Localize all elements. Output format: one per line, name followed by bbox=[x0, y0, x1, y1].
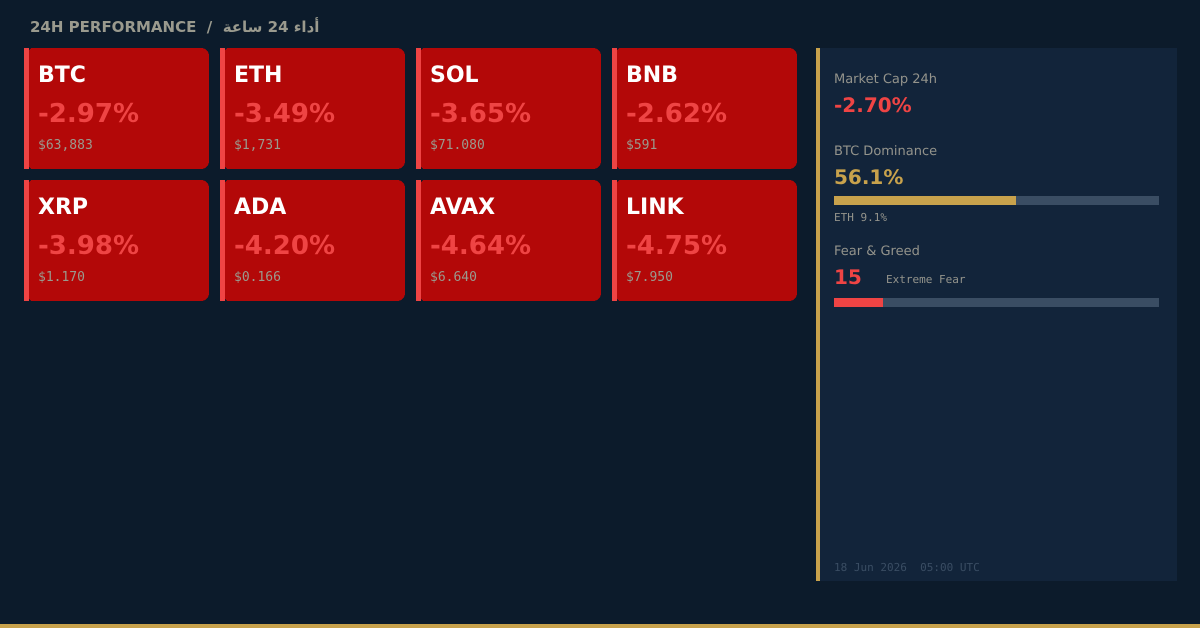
card: ETH: $1,731 bbox=[234, 138, 281, 153]
market cap label: Market Cap 24h bbox=[834, 72, 937, 87]
BTC dominance value: 56.1% bbox=[834, 165, 903, 189]
card: ADA: -4.20% bbox=[234, 231, 335, 261]
card: LINK: -4.75% bbox=[626, 231, 727, 261]
fear and greed progress bar bbox=[834, 298, 1159, 307]
panel: market stats bbox=[816, 48, 1177, 581]
card: ADA: $0.166 bbox=[234, 270, 281, 285]
market cap value: -2.70% bbox=[834, 93, 912, 117]
card: XRP: -3.98% bbox=[38, 231, 139, 261]
ETH dominance: ETH 9.1% bbox=[834, 211, 887, 224]
card: LINK: LINK bbox=[626, 195, 685, 220]
dominance progress bar bbox=[834, 196, 1159, 205]
card: XRP: $1.170 bbox=[38, 270, 85, 285]
title: 24H PERFORMANCE / أداء 24 ساعة bbox=[30, 18, 319, 36]
card: SOL: $71.080 bbox=[430, 138, 485, 153]
fear and greed value: 15 bbox=[834, 265, 862, 289]
card: ADA bbox=[220, 180, 405, 301]
card: SOL: -3.65% bbox=[430, 99, 531, 129]
card: LINK: $7.950 bbox=[626, 270, 673, 285]
card: BNB: $591 bbox=[626, 138, 657, 153]
card: SOL: SOL bbox=[430, 63, 479, 88]
card: BTC: $63,883 bbox=[38, 138, 93, 153]
card: BTC: BTC bbox=[38, 63, 86, 88]
card: AVAX: $6.640 bbox=[430, 270, 477, 285]
card: AVAX: -4.64% bbox=[430, 231, 531, 261]
bottom accent bar bbox=[0, 624, 1200, 628]
BTC dominance label: BTC Dominance bbox=[834, 144, 937, 159]
card: ETH bbox=[220, 48, 405, 169]
card: AVAX: AVAX bbox=[430, 195, 495, 220]
card: XRP: XRP bbox=[38, 195, 88, 220]
card: BTC: -2.97% bbox=[38, 99, 139, 129]
card: ETH: -3.49% bbox=[234, 99, 335, 129]
card: XRP bbox=[24, 180, 209, 301]
card: AVAX bbox=[416, 180, 601, 301]
card: SOL bbox=[416, 48, 601, 169]
card: BTC bbox=[24, 48, 209, 169]
card: ETH: ETH bbox=[234, 63, 282, 88]
card: BNB: -2.62% bbox=[626, 99, 727, 129]
card: BNB bbox=[612, 48, 797, 169]
timestamp: 18 Jun 2026 05:00 UTC bbox=[834, 561, 980, 574]
card: ADA: ADA bbox=[234, 195, 286, 220]
fear and greed label: Fear & Greed bbox=[834, 244, 920, 259]
fear and greed status: Extreme Fear bbox=[886, 273, 965, 286]
card: LINK bbox=[612, 180, 797, 301]
card: BNB: BNB bbox=[626, 63, 678, 88]
